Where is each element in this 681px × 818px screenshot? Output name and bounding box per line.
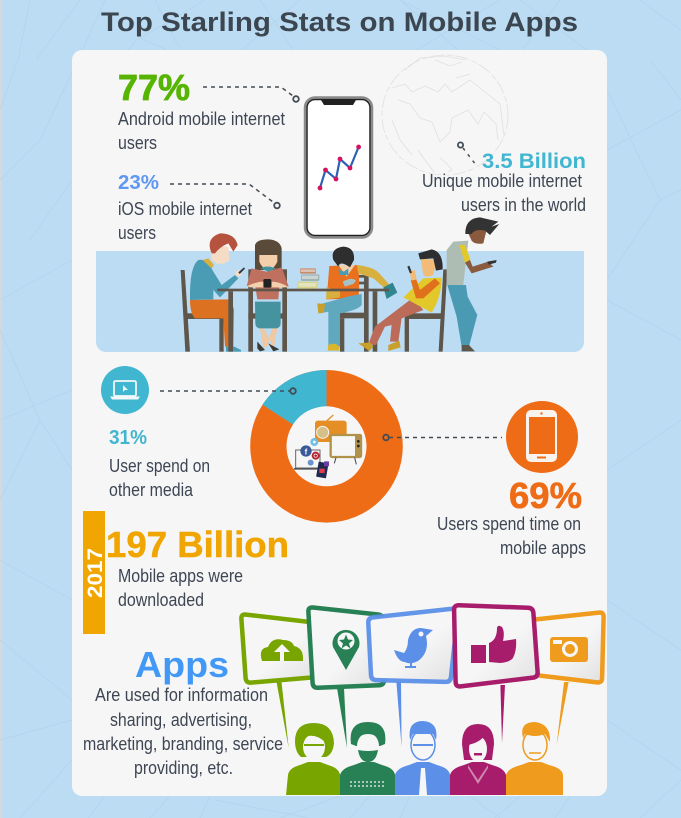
stat: ios 23%: users [118, 223, 156, 243]
person 4 [358, 249, 443, 351]
stat: 31% other media [109, 427, 210, 500]
illustration: people with phones at a table [181, 217, 499, 352]
icon: smartphone with line chart [305, 98, 372, 238]
icon: laptop circle [101, 366, 149, 414]
stat: 69% mobile apps: mobile apps [500, 538, 586, 558]
chair 4 [405, 269, 447, 352]
stat: ios 23% [118, 172, 252, 243]
icon: media devices [294, 415, 361, 478]
speech sign: orange camera [531, 613, 604, 745]
connector: other media [160, 388, 296, 394]
chair 3 [338, 274, 369, 352]
connector: android to phone [203, 87, 299, 102]
stat: 69% mobile apps: 69% [509, 475, 582, 516]
stat: 197 billion: Mobile apps were [118, 566, 243, 586]
text: apps uses: sharing, advertising, [110, 710, 252, 730]
person: magenta [450, 724, 506, 795]
stat: 3.5 billion: users in the world [461, 195, 586, 215]
speech sign: thumbs up [454, 605, 538, 743]
stat: 31% other media: other media [109, 480, 194, 500]
text: apps uses: Are used for information [95, 685, 268, 705]
stat: ios 23%: iOS mobile internet [118, 199, 252, 219]
speech sign: bird [368, 609, 458, 747]
stat: ios 23%: 23% [118, 172, 159, 194]
stat: 3.5 billion: Unique mobile internet [422, 171, 582, 191]
connector: globe to stat [458, 142, 476, 165]
person 3 [317, 247, 397, 351]
panel: main card [72, 50, 607, 796]
speech sign: location pin [308, 607, 384, 748]
stat: android 77%: Android mobile internet [118, 109, 285, 129]
stat: 31% other media: 31% [109, 427, 147, 449]
stat: android 77%: users [118, 133, 157, 153]
person 5 [447, 217, 499, 351]
text: apps uses: marketing, branding, service [83, 734, 283, 754]
stat: 197 billion [106, 524, 289, 610]
chart: donut of time spent [250, 370, 403, 523]
stat: 3.5 billion: 3.5 Billion [482, 150, 586, 173]
table [217, 289, 389, 352]
icon: media devices: f [305, 448, 308, 457]
stat: 197 billion: 197 Billion [106, 524, 289, 565]
stat: android 77%: 77% [118, 67, 190, 108]
stat: 31% other media: User spend on [109, 456, 210, 476]
stat: android 77% [118, 67, 285, 153]
person: dark green [340, 722, 395, 795]
stat: 69% mobile apps [437, 475, 586, 558]
person 1 [190, 233, 245, 352]
person: blue [395, 721, 450, 795]
connector: mobile apps [383, 435, 502, 440]
year tag 2017: 2017 [84, 548, 107, 598]
text: apps uses: Apps [135, 644, 229, 685]
speech sign: cloud upload [241, 615, 318, 748]
text: apps uses [83, 644, 283, 778]
person 2 [247, 239, 289, 351]
chair 2 [248, 269, 287, 352]
person: green [286, 723, 340, 795]
books [297, 268, 319, 289]
stat: 69% mobile apps: Users spend time on [437, 514, 581, 534]
icon: globe [382, 55, 508, 175]
connector: ios to phone [170, 184, 280, 208]
panel: light blue band [96, 251, 584, 352]
title: Top Starling Stats on Mobile Apps [101, 7, 578, 37]
stat: 3.5 billion [422, 150, 586, 215]
person: orange [506, 722, 563, 795]
year tag 2017 [83, 511, 107, 634]
icon: phone circle [506, 401, 578, 473]
chair left [181, 270, 224, 352]
text: apps uses: providing, etc. [134, 758, 233, 778]
stat: 197 billion: downloaded [118, 590, 204, 610]
